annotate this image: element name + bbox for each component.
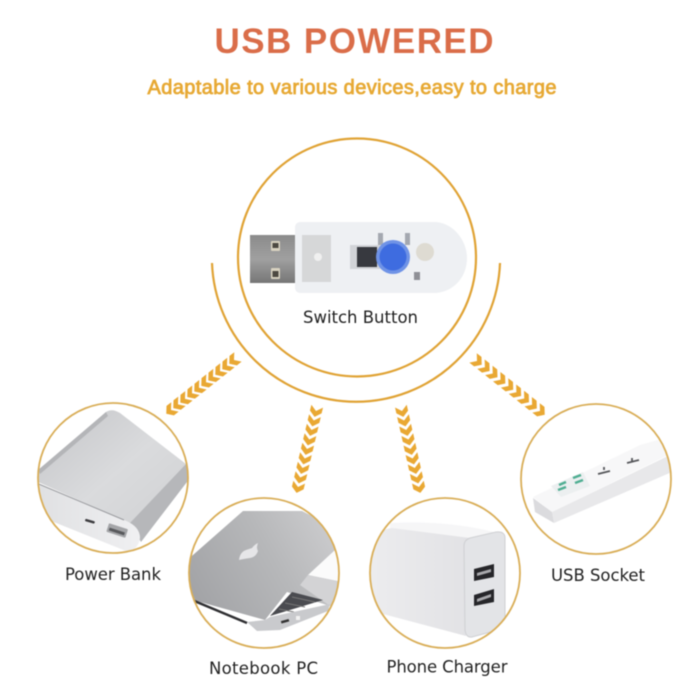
arrow: to notebook [291,405,323,494]
icon: power strip [532,457,670,523]
icon: power bank [34,410,190,551]
icon: blue button [376,240,410,274]
label: Phone Charger: Phone Charger [386,658,508,676]
panel: phone charger [365,498,520,648]
icon: laptop [185,511,342,631]
arrow: to USB socket [469,353,548,419]
arrow: to power bank [163,352,242,418]
label: Power Bank: Power Bank [65,565,161,584]
label: USB Socket: USB Socket [551,566,646,585]
title: USB POWERED [214,22,494,61]
label: Notebook PC: Notebook PC [209,659,318,678]
outer arc [212,263,500,402]
subtitle: Adaptable to various devices,easy to charge [148,77,556,99]
label: Switch Button: Switch Button [303,308,418,327]
panel: USB socket [521,404,672,554]
icon: wall charger [365,522,505,637]
arrow: to phone charger [395,405,426,494]
panel: notebook PC [185,498,342,648]
icon: USB stick [250,222,467,293]
main circle: switch button [238,138,476,376]
panel: power bank [34,403,190,553]
